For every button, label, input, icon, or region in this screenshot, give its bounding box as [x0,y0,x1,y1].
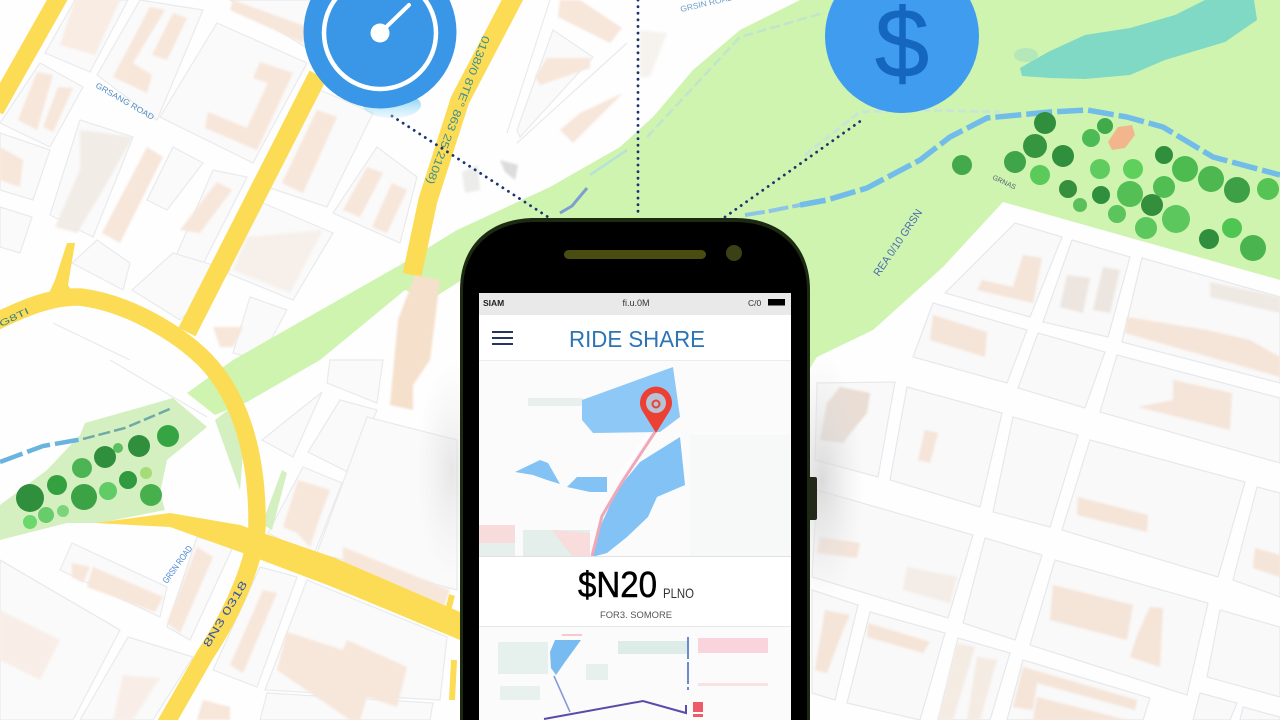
status bar: SIAM [483,298,504,308]
phone body [460,218,810,720]
soft shading beside phone: left [416,360,488,580]
price [479,556,791,605]
lake [1020,0,1257,79]
small grey smudges [462,160,518,193]
dotted connector lines [392,0,862,217]
status bar: fi.u.0M [622,298,650,308]
screen [479,293,791,720]
icon: speedometer [304,0,456,118]
peach buildings: left side [0,0,667,720]
soft shading beside phone: right [780,355,864,605]
speaker [564,250,706,259]
city blocks: right side [812,223,1280,720]
road and park labels: 8N3 0318 [201,579,250,650]
blue path through park [0,13,1280,462]
park: thin green strips [215,410,287,530]
phone [460,218,817,720]
road and park labels: 0138/0 8TE° 863 25 2108) [424,34,491,186]
icon: dollar coin [825,0,979,113]
price: PLNO [663,585,694,601]
status bar: C/0 [748,298,762,308]
small pond [1014,48,1038,62]
road and park labels: GRNAS [991,174,1017,191]
city blocks: left side [0,0,593,720]
bottom map [479,626,791,720]
trees: right park [952,112,1279,261]
side button [808,477,817,520]
park: lower left green area [0,398,207,540]
peach buildings: right side [815,255,1280,720]
screen map [479,361,791,557]
park: large green area [187,0,1280,415]
trees: left park [16,425,179,529]
faded road continuation [390,275,440,410]
status bar [479,293,791,315]
app header: RIDE SHARE [569,326,705,352]
yellow road: tapered crossing road [95,513,460,640]
fare note: FOR3. SOMORE [600,610,672,620]
camera [726,245,742,261]
location pin [640,387,672,433]
yellow road: short spur [45,243,76,302]
yellow roads [0,0,515,720]
price: $N20 [578,564,657,605]
road and park labels [0,0,1017,650]
road and park labels: REA 0/10 GRSN [872,207,925,279]
road and park labels: GRSN ROAD [161,543,195,585]
minor street lines [0,0,627,630]
road and park labels: GRSANG ROAD [94,81,156,122]
